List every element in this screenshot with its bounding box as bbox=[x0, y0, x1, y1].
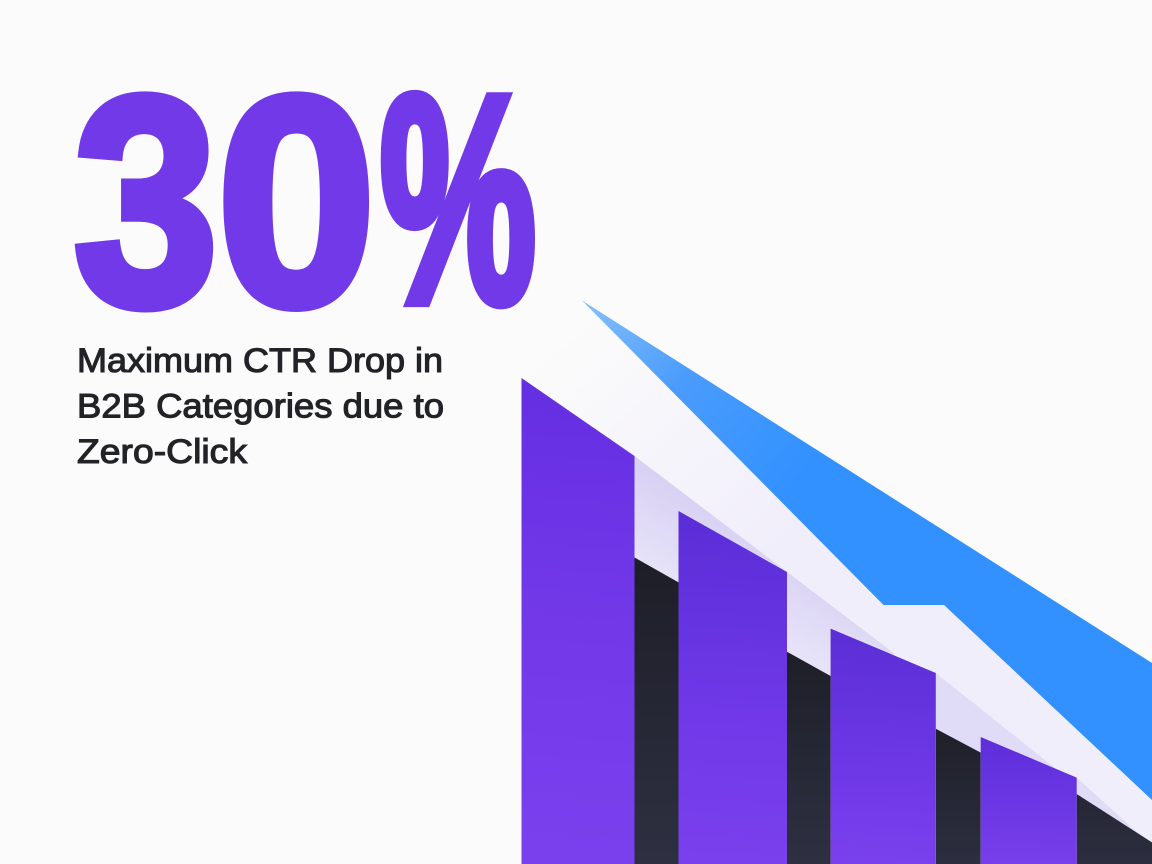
subtitle text: Maximum CTR Drop in bbox=[77, 342, 443, 380]
light lavender band under blue wedge bbox=[521, 300, 1152, 842]
big number: 30%: 0 bbox=[217, 35, 376, 367]
purple bar 4 bbox=[981, 737, 1077, 864]
big number: 30%: % bbox=[380, 35, 536, 364]
purple bar 1 bbox=[522, 378, 634, 864]
lavender shadow behind bars bbox=[634, 456, 1140, 835]
subtitle text: Zero-Click bbox=[77, 433, 248, 471]
dark gap columns bbox=[634, 558, 1152, 864]
big number: 30%: 3 bbox=[74, 36, 218, 368]
purple bar 3 bbox=[831, 629, 936, 864]
chart: declining bars with blue trend wedge bbox=[521, 300, 1152, 864]
subtitle text bbox=[77, 342, 444, 471]
purple bar 2 bbox=[678, 511, 787, 864]
subtitle text: B2B Categories due to bbox=[77, 388, 444, 426]
big number: 30% bbox=[74, 35, 536, 368]
blue trend wedge bbox=[582, 300, 1152, 800]
